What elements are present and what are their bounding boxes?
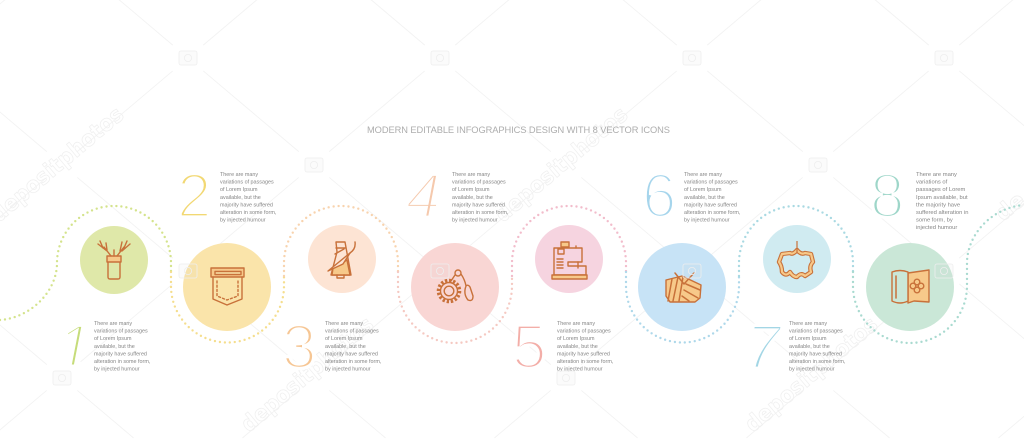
number 3: 3 [282, 313, 316, 382]
text 4: alteration in some form, [452, 210, 509, 216]
step 7 [746, 225, 846, 382]
icon: ruffled collar [779, 241, 813, 277]
circle 4 [411, 243, 499, 331]
text 7: There are many [789, 321, 827, 327]
circle 3 [308, 225, 376, 293]
text 5: variations of passages [557, 329, 611, 335]
number 1 base cover [56, 364, 88, 370]
text 4: available, but the [452, 195, 493, 201]
text 2: of Lorem Ipsum [220, 187, 258, 193]
text 3: of Lorem Ipsum [325, 336, 363, 342]
text 5: alteration in some form, [557, 359, 614, 365]
text 7: available, but the [789, 344, 830, 350]
text 1: majority have suffered [94, 351, 147, 357]
step 3 [282, 225, 382, 382]
text 3: by injected humour [325, 367, 371, 373]
step 1 [56, 226, 151, 382]
icon: yarn skein with needles [666, 273, 701, 302]
text 4: majority have suffered [452, 202, 505, 208]
step 2 [177, 162, 277, 331]
text 7: variations of passages [789, 329, 843, 335]
circle 5 [535, 225, 603, 293]
number 8: 8 [870, 162, 904, 231]
text 2: There are many [220, 172, 258, 178]
number 1: 1 [57, 313, 91, 382]
text 8: variations of [916, 180, 948, 186]
watermark text [0, 102, 1024, 438]
text 1: There are many [94, 321, 132, 327]
icon: sleeve with antlers [98, 241, 130, 279]
watermark text: depositphotos [491, 102, 633, 228]
text 1: alteration in some form, [94, 359, 151, 365]
text 6: alteration in some form, [684, 210, 741, 216]
title: MODERN EDITABLE INFOGRAPHICS DESIGN WITH 8 VECTOR ICONS [367, 125, 670, 135]
icon: pocket [211, 268, 244, 305]
text 2: majority have suffered [220, 202, 273, 208]
text 4: of Lorem Ipsum [452, 187, 490, 193]
text 2: alteration in some form, [220, 210, 277, 216]
icon: gear and safety pin [438, 270, 473, 302]
text 6: majority have suffered [684, 202, 737, 208]
text 1: available, but the [94, 344, 135, 350]
text 3: There are many [325, 321, 363, 327]
circle 7 [763, 225, 831, 293]
text 3: alteration in some form, [325, 359, 382, 365]
text 1: variations of passages [94, 329, 148, 335]
icon: sewing machine [552, 242, 587, 279]
text 4: variations of passages [452, 180, 506, 186]
text 7: by injected humour [789, 367, 835, 373]
circle 6 [638, 243, 726, 331]
text 5: of Lorem Ipsum [557, 336, 595, 342]
text 6: There are many [684, 172, 722, 178]
circle 2 [183, 243, 271, 331]
text 5: majority have suffered [557, 351, 610, 357]
step 5 [512, 225, 614, 382]
text 8: the majority have [916, 202, 960, 208]
text 3: majority have suffered [325, 351, 378, 357]
text 1: of Lorem Ipsum [94, 336, 132, 342]
text 8: injected humour [916, 225, 957, 231]
watermark text: depositphotos [237, 312, 379, 438]
text 7: of Lorem Ipsum [789, 336, 827, 342]
text 5: by injected humour [557, 367, 603, 373]
number 4: 4 [406, 162, 440, 231]
watermark text: depositphotos [741, 312, 883, 438]
text 8: There are many [916, 172, 957, 178]
dotted connector path [0, 205, 1024, 343]
number 2: 2 [177, 162, 211, 231]
text 8: passages of Lorem [916, 187, 965, 193]
text 4: by injected humour [452, 218, 498, 224]
circle 1 [80, 226, 148, 294]
step 6 [638, 162, 741, 331]
text 1: by injected humour [94, 367, 140, 373]
text 7: alteration in some form, [789, 359, 846, 365]
number 5: 5 [512, 313, 546, 382]
text 8: some form, by [916, 218, 953, 224]
number 7: 7 [746, 313, 783, 382]
text 2: available, but the [220, 195, 261, 201]
icon: fabric roll [892, 270, 929, 303]
watermark stamps [53, 51, 953, 385]
text 3: available, but the [325, 344, 366, 350]
text 8: Ipsum available, but [916, 195, 968, 201]
text 7: majority have suffered [789, 351, 842, 357]
number 6: 6 [642, 162, 676, 231]
circle 8 [866, 243, 954, 331]
text 4: There are many [452, 172, 490, 178]
text 6: available, but the [684, 195, 725, 201]
text 5: available, but the [557, 344, 598, 350]
text 8: suffered alteration in [916, 210, 968, 216]
icon: thread spool and needle [328, 242, 355, 278]
text 2: variations of passages [220, 180, 274, 186]
text 6: of Lorem Ipsum [684, 187, 722, 193]
text 2: by injected humour [220, 218, 266, 224]
text 6: by injected humour [684, 218, 730, 224]
text 6: variations of passages [684, 180, 738, 186]
text 5: There are many [557, 321, 595, 327]
step 4 [406, 162, 509, 331]
step 8 [866, 162, 968, 331]
text 3: variations of passages [325, 329, 379, 335]
